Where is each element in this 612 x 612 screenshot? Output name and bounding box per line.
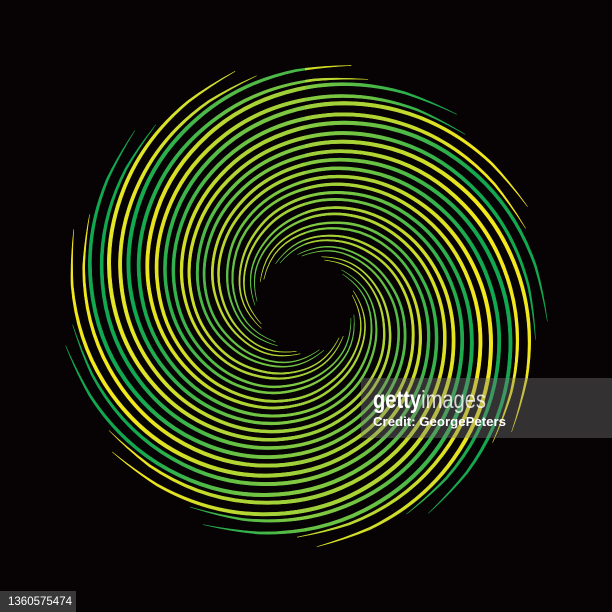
arm pair 2 inner: [145, 86, 366, 410]
arm pair 9 outer: [108, 206, 456, 516]
arm pair 7 inner: [226, 180, 305, 346]
spiral swirl: [65, 65, 548, 547]
arm pair 11 inner: [275, 239, 305, 264]
arm pair 8 inner: [238, 196, 305, 329]
lime colour blend at top and bottom of swirl: [145, 65, 467, 547]
arm pair 3 inner: [163, 106, 355, 394]
arm pair 11 outer: [70, 214, 422, 478]
arm pair 8 outer: [190, 191, 474, 534]
image id label: [0, 591, 76, 612]
arm pair 5 inner: [196, 144, 324, 368]
arm pair 2 outer: [305, 82, 466, 135]
watermark logo: gettyimages: [373, 386, 486, 414]
arm pair 10 outer: [65, 222, 438, 497]
arm pair 6 inner: [211, 162, 305, 356]
arm pair 12: [0, 62, 461, 527]
arm pair 1 inner: [126, 68, 378, 426]
image id label: 1360575474: [8, 596, 73, 608]
arm pair 13: [54, 41, 431, 480]
arm pair 4 inner: [180, 125, 344, 380]
arm pair 1 outer: [305, 65, 368, 83]
arm pair 3 outer: [305, 101, 528, 229]
arm pair 10 inner: [260, 226, 305, 282]
arm pair 6 outer: [305, 158, 512, 514]
watermark band: [361, 378, 612, 438]
arm pair 7 outer: [297, 174, 493, 547]
watermark credit: Credit: GeorgePeters: [373, 414, 506, 429]
arm pair 9 inner: [250, 212, 305, 306]
arm pair 4 outer: [305, 120, 548, 340]
arm pair 5 outer: [305, 140, 531, 443]
